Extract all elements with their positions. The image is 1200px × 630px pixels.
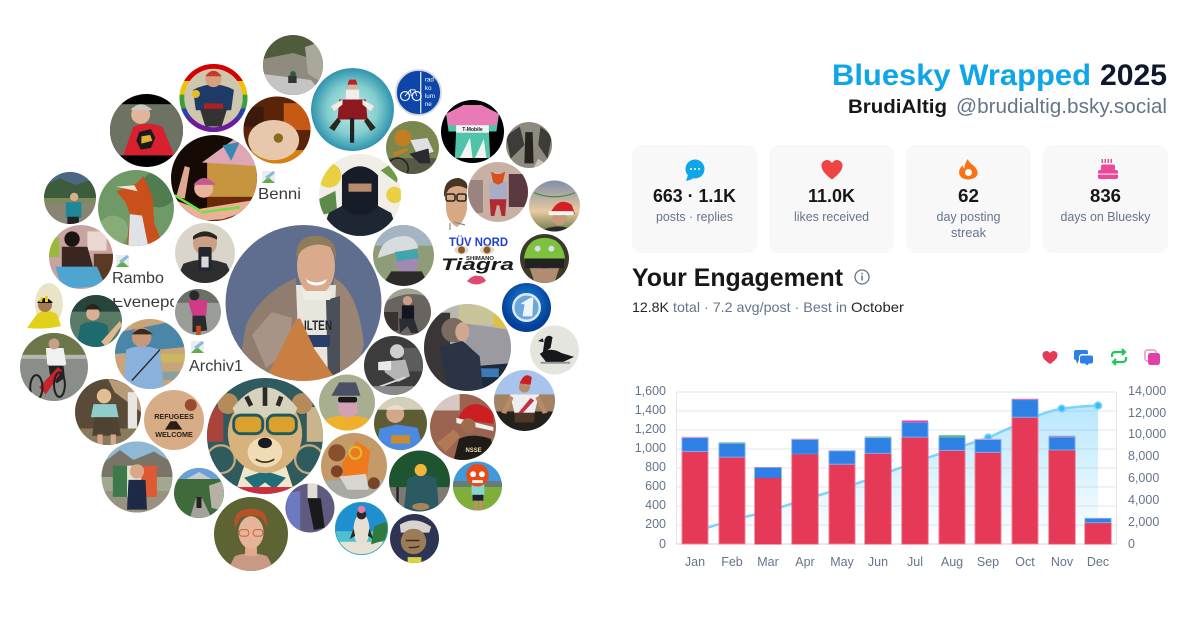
avatar: bucket hat and pink face mask	[319, 374, 375, 430]
avatar: child in lederhosen	[75, 379, 141, 445]
avatar: ARD logo globe	[502, 283, 551, 332]
icon: flame	[959, 159, 978, 180]
right axis labels: 10,000	[1128, 427, 1166, 441]
left axis labels: 1,000	[635, 441, 666, 455]
month labels: Mar	[757, 555, 779, 569]
stat card: posting streak	[906, 145, 1031, 253]
avatar: main portrait in fur coat: ILTEN	[304, 317, 332, 333]
month labels: Jan	[685, 555, 705, 569]
stat card: likes: 11.0K	[808, 186, 855, 206]
avatar: man with lemons wallpaper in black balaclava	[317, 154, 403, 236]
avatar: radkolumne logo: ne	[425, 101, 432, 108]
icon: info	[855, 270, 869, 284]
month labels: Feb	[721, 555, 743, 569]
right axis labels: 4,000	[1128, 493, 1159, 507]
month labels	[685, 555, 1109, 569]
avatar: party flag at night	[171, 135, 257, 221]
stat card: posts and replies: posts · replies	[656, 210, 733, 224]
heading: Your Engagement: Your Engagement	[632, 264, 844, 292]
avatar: man in dark shirt under umbrella	[384, 288, 431, 336]
avatar: person in purple jeans	[286, 484, 334, 532]
legend: reposts icon	[1112, 349, 1126, 365]
broken image: Archiv1	[189, 341, 243, 375]
avatar: santa hat drinking	[430, 394, 496, 460]
left axis labels: 1,400	[635, 403, 666, 417]
avatar: bitmoji man with glasses	[444, 178, 467, 230]
stat card: posting streak: streak	[951, 226, 987, 240]
avatar: man in blue shirt by tiled wall	[115, 319, 185, 389]
month labels: Nov	[1051, 555, 1074, 569]
stat card: posts and replies: 663 · 1.1K	[653, 186, 736, 206]
avatar: cap in warm sauna	[244, 96, 310, 164]
right axis labels: 2,000	[1128, 515, 1159, 529]
avatar: hiker in valley	[44, 172, 96, 224]
title: 2025	[1100, 59, 1167, 92]
avatar: drawn red-haired person	[214, 497, 288, 571]
stat card: likes: likes received	[794, 210, 869, 224]
broken image: Rambo Evenepoel: Rambo	[112, 270, 164, 287]
cumulative line	[695, 406, 1098, 532]
avatar: tram driver cabin	[424, 304, 511, 391]
engagement summary: total · 7.2 avg/post · Best in	[673, 299, 847, 315]
right axis labels: 14,000	[1128, 384, 1166, 398]
broken image: Archiv1: Archiv1	[189, 358, 243, 375]
avatar: radkolumne logo: rad	[425, 77, 434, 84]
avatar: woman at desk	[49, 225, 113, 289]
broken image: Rambo Evenepoel	[112, 255, 192, 311]
month labels: Oct	[1015, 555, 1035, 569]
user name and handle	[848, 96, 1167, 118]
legend: quotes icon	[1145, 350, 1160, 365]
engagement summary: October	[851, 299, 904, 315]
avatar: black and white vintage cyclist	[364, 336, 423, 395]
avatar: refugees welcome patch: WELCOME	[155, 430, 193, 439]
avatar: radkolumne logo: ko	[425, 85, 432, 92]
month labels: Jun	[868, 555, 888, 569]
avatar: mirror selfie man	[175, 223, 235, 283]
avatar: TÜV Nord Shimano Tiagra meme	[441, 234, 514, 284]
left axis labels: 600	[645, 479, 666, 493]
stat card: likes	[769, 145, 894, 253]
avatar: woman with flag in mountains	[102, 442, 172, 512]
stat card: days on Bluesky	[1043, 145, 1168, 253]
grid lines	[676, 392, 1116, 544]
avatar: angry emoji head on green field	[453, 462, 502, 510]
month labels: Apr	[795, 555, 815, 569]
combo chart	[635, 384, 1166, 569]
avatar: main portrait in fur coat	[226, 225, 382, 385]
month labels: Jul	[907, 555, 923, 569]
broken image: Benni: Benni	[258, 186, 301, 203]
left axis labels: 400	[645, 498, 666, 512]
right axis labels: 12,000	[1128, 406, 1166, 420]
avatar: cyclist in alpine valley	[174, 468, 224, 518]
stacked monthly bars	[682, 399, 1111, 544]
stat card: posts and replies	[632, 145, 757, 253]
stat card: days on Bluesky: 836	[1090, 186, 1121, 206]
stat card: days on Bluesky: days on Bluesky	[1060, 210, 1151, 224]
left axis labels: 200	[645, 517, 666, 531]
avatar: rainbow ring rider	[180, 64, 248, 132]
right axis labels: 0	[1128, 537, 1135, 551]
avatar: refugees welcome patch	[144, 390, 204, 450]
left axis labels	[635, 384, 666, 551]
cumulative markers	[985, 402, 1102, 441]
avatar: green helmet sunglasses selfie	[520, 234, 569, 283]
avatar: fox head in supermarket	[468, 162, 528, 222]
icon: heart	[822, 160, 842, 180]
month labels: May	[830, 555, 855, 569]
avatar: TÜV Nord Shimano Tiagra meme: Tiagra	[441, 255, 514, 274]
avatar: cyclist on mountain road	[263, 35, 323, 95]
right axis labels: 8,000	[1128, 449, 1159, 463]
avatar: man in blue shirt with chocolate box	[374, 397, 427, 450]
avatar: man in green jacket with baguette	[70, 295, 122, 347]
avatar: old engraving	[506, 122, 552, 168]
avatar: cartoon mouse with orange shirt	[321, 433, 387, 499]
avatar: vintage rider portrait	[390, 514, 439, 563]
avatar: pink jersey cyclist from behind	[175, 289, 221, 335]
right axis labels	[1128, 384, 1166, 551]
broken image: Benni	[258, 171, 301, 203]
avatar: refugees welcome patch: REFUGEES	[154, 412, 194, 421]
avatar: cartoon fox	[98, 170, 177, 246]
avatar: pro cyclist with santa hat	[494, 370, 555, 431]
cumulative area	[695, 406, 1098, 544]
engagement summary: 12.8K	[632, 299, 670, 315]
avatar: radkolumne logo	[396, 70, 441, 115]
icon: chat bubble	[686, 160, 704, 181]
left axis labels: 800	[645, 460, 666, 474]
user name and handle: @brudialtig.bsky.social	[956, 96, 1167, 118]
broken image: Rambo Evenepoel: Evenepoel	[112, 294, 192, 311]
avatar: TÜV Nord Shimano Tiagra meme: SHIMANO	[466, 256, 494, 262]
avatar: penguin on the beach	[335, 502, 388, 555]
avatar: yellow jersey rider	[27, 283, 63, 329]
month labels: Dec	[1087, 555, 1109, 569]
avatar: cyclist with white helmet and purple mask	[373, 225, 434, 286]
right axis labels: 6,000	[1128, 471, 1159, 485]
avatar: kid in red jersey	[110, 94, 183, 167]
engagement summary	[632, 299, 904, 315]
stat card: posting streak: 62	[958, 186, 979, 206]
avatar: santa on bicycle	[311, 68, 394, 151]
avatar: shiba riding bike	[386, 121, 439, 179]
legend: heart icon	[1042, 351, 1058, 364]
avatar: bear with bike helmet and goggles	[207, 378, 323, 494]
avatar: teal and pink team jersey	[441, 100, 504, 163]
avatar: man in teal jersey with emoji face	[389, 450, 450, 512]
left axis labels: 1,600	[635, 384, 666, 398]
avatar: TÜV Nord Shimano Tiagra meme: TÜV NORD	[449, 234, 508, 249]
stat card: posting streak: day posting	[936, 210, 1001, 224]
avatar: radkolumne logo: lum	[425, 93, 435, 100]
left axis labels: 0	[659, 537, 666, 551]
month labels: Aug	[941, 555, 963, 569]
legend: replies icon	[1074, 350, 1093, 366]
avatar: santa hat selfie at sunset	[529, 180, 580, 232]
avatar: road cyclist in red bike	[20, 333, 88, 401]
user name and handle: BrudiAltig	[848, 97, 947, 118]
left axis labels: 1,200	[635, 422, 666, 436]
avatar: teal and pink team jersey: T-Mobile	[462, 127, 483, 133]
avatar cloud	[20, 35, 580, 571]
month labels: Sep	[977, 555, 999, 569]
title: Bluesky Wrapped	[832, 59, 1091, 92]
icon: birthday cake	[1098, 159, 1118, 179]
avatar: duck illustration	[530, 326, 579, 374]
avatar: santa hat drinking: NSSE	[465, 448, 482, 454]
